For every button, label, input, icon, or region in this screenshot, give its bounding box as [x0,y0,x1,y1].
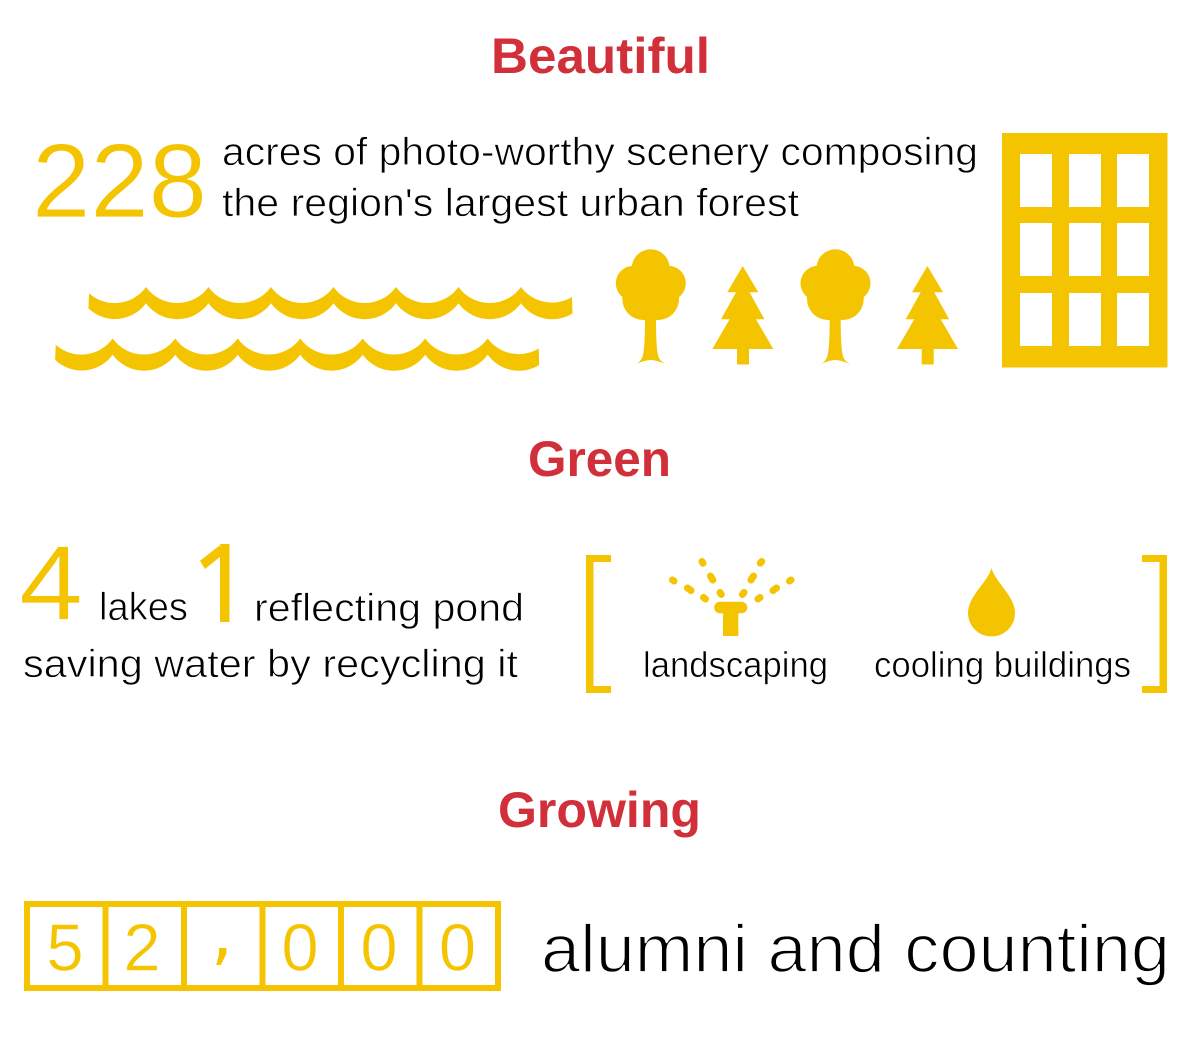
label: reflecting pond: reflecting pond [254,587,524,630]
label: landscaping: landscaping [643,644,828,685]
icon: lake waves [55,287,572,371]
label: cooling buildings: cooling buildings [874,644,1131,685]
text block: scenery description [222,131,978,225]
counter: 52,000: 0 [360,910,398,986]
big number: 1 reflecting pond [200,544,230,622]
icon: round tree [800,249,870,364]
section: Green [19,431,1167,693]
icon: round tree [616,249,686,364]
left bracket [586,555,611,693]
text: saving water: saving water by recycling it [23,643,518,686]
right bracket [1142,555,1167,693]
text block: scenery description: acres of photo-worthy scenery composing [222,131,978,174]
label: lakes: lakes [99,586,188,629]
big number: 228 acres: 228 [32,123,207,240]
big number: 1 reflecting pond: 1 [196,523,257,646]
counter: 52,000: , [211,892,233,974]
big number: 4 lakes: 4 [19,524,83,642]
text block: scenery description: the region's largest urban forest [222,182,799,225]
icon: pine tree [897,266,958,364]
counter: 52,000 [24,892,501,991]
counter: 52,000: 5 [46,910,84,986]
heading: Growing: Growing [498,782,701,838]
heading: Beautiful: Beautiful [491,28,710,84]
heading: Green: Green [528,431,671,487]
icon: building [1002,133,1168,368]
icon: sprinkler [672,562,791,636]
counter: 52,000: 2 [123,910,161,986]
text: alumni and counting: alumni and counting [541,911,1170,987]
counter: 52,000: 0 [281,910,319,986]
icon: pine tree [712,266,773,364]
icon: water drop [968,568,1015,636]
section: Beautiful [32,28,1168,371]
section: Growing [24,782,1170,991]
counter: 52,000: 0 [439,910,476,986]
